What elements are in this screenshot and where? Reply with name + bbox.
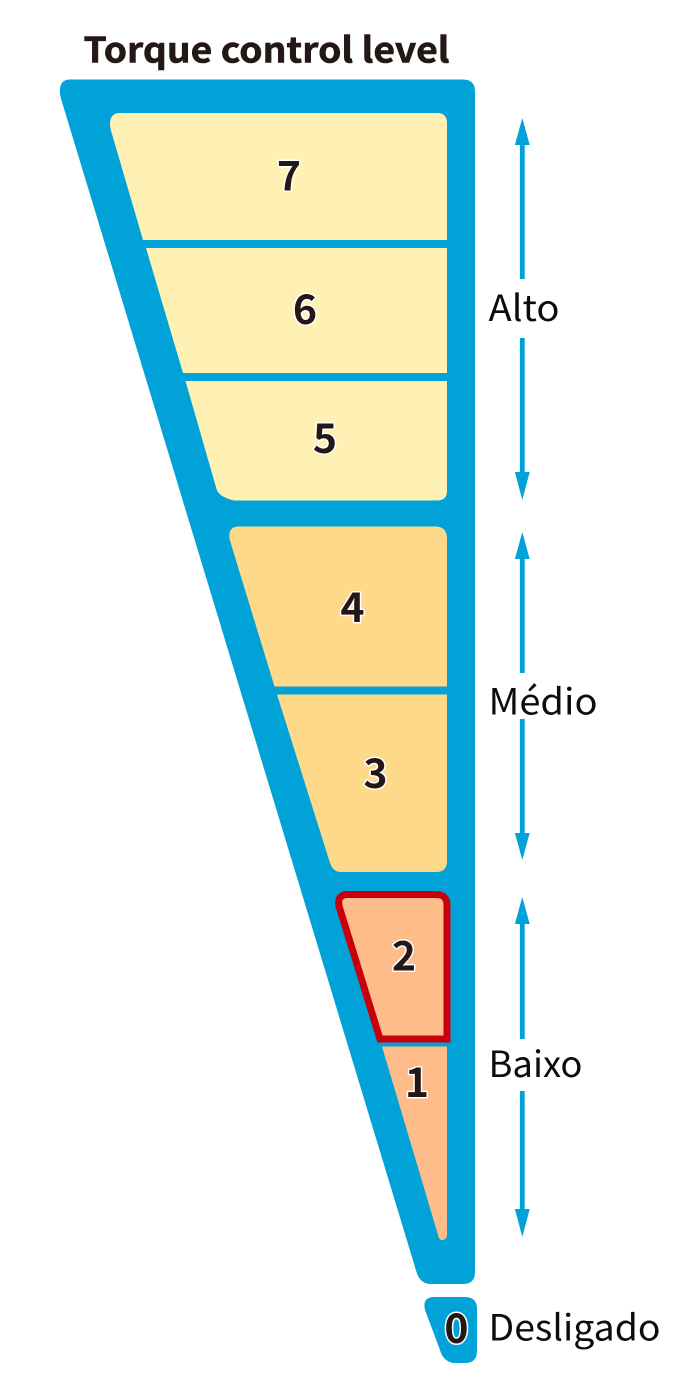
label: Baixo: Baixo bbox=[488, 1036, 582, 1088]
arrow: Médio range bbox=[515, 532, 530, 860]
segment 5 bbox=[186, 381, 447, 500]
level numbers: 3 bbox=[363, 740, 388, 800]
segment 4 bbox=[229, 526, 447, 686]
segment 7 bbox=[110, 113, 447, 240]
title: Torque control level bbox=[84, 22, 450, 74]
segment 2 with red highlight bbox=[339, 894, 447, 1039]
segment 3 bbox=[277, 694, 447, 872]
level numbers: 5 bbox=[313, 405, 337, 465]
off segment 0: 0 bbox=[444, 1295, 469, 1355]
level numbers: 6 bbox=[293, 276, 317, 336]
label: Desligado: Desligado bbox=[488, 1300, 660, 1352]
arrow: Baixo range bbox=[515, 897, 530, 1237]
level numbers: 4 bbox=[340, 574, 365, 634]
label: Médio: Médio bbox=[488, 674, 598, 726]
arrow: Alto range bbox=[515, 118, 530, 500]
off segment 0 bbox=[424, 1295, 477, 1363]
segment 1 bbox=[382, 1046, 447, 1240]
level numbers: 1 bbox=[405, 1049, 429, 1109]
label: Alto: Alto bbox=[488, 280, 560, 332]
segment 6 bbox=[146, 248, 447, 373]
level numbers: 2 bbox=[392, 922, 416, 982]
gauge: blue wedge frame bbox=[60, 80, 475, 1284]
level numbers: 7 bbox=[277, 142, 301, 202]
level numbers bbox=[277, 142, 429, 1109]
